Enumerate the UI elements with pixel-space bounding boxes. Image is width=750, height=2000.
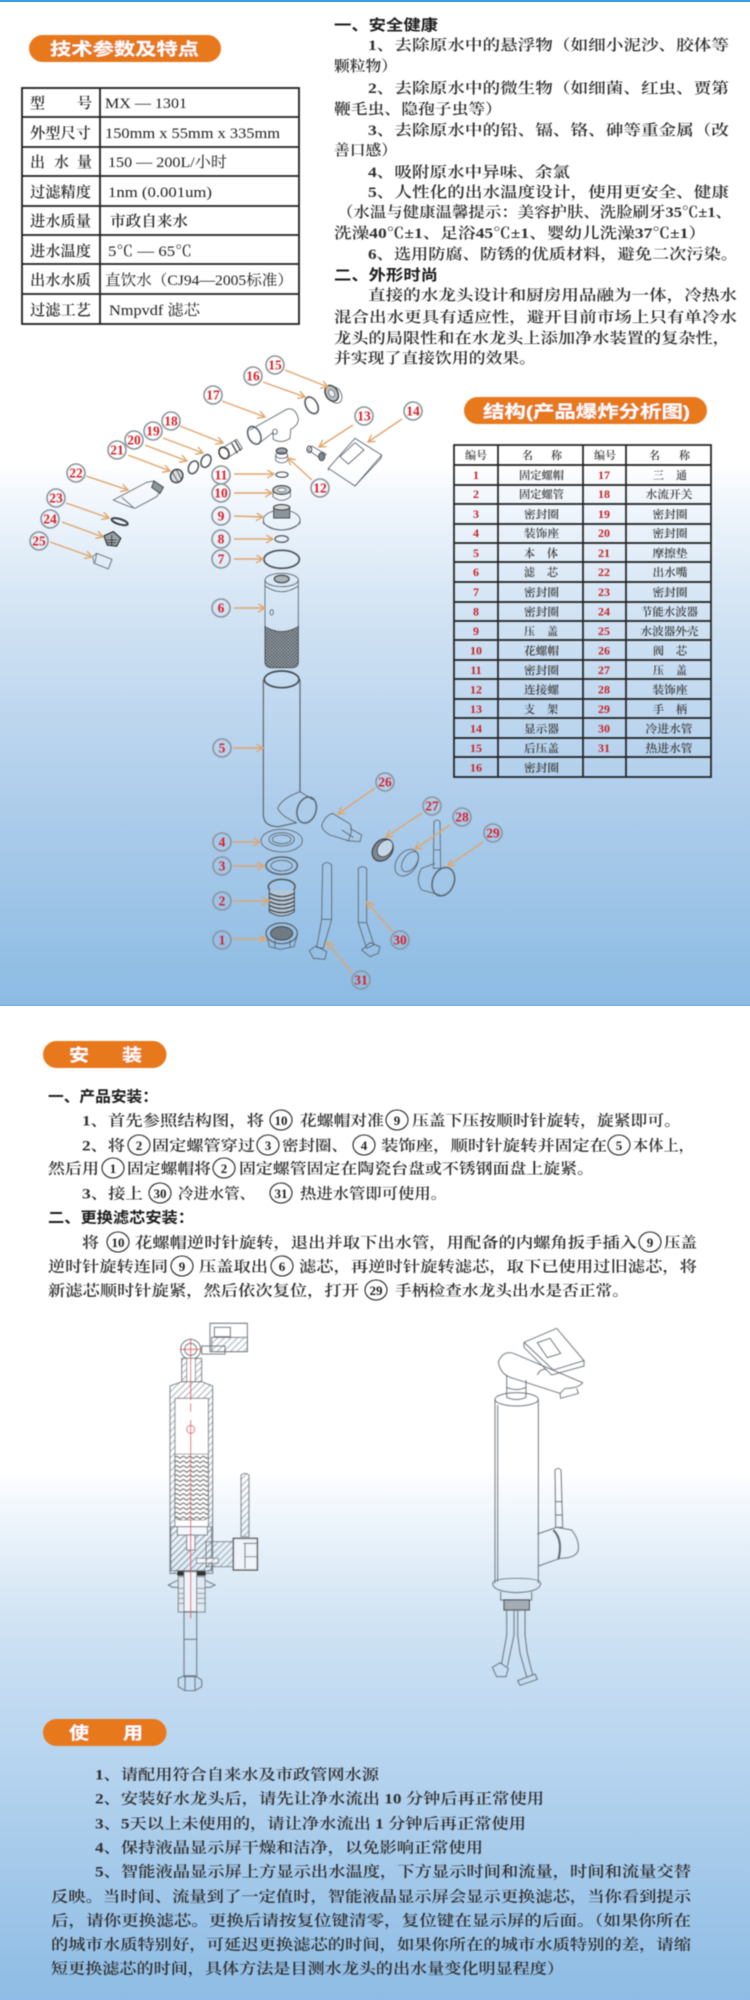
filter replacement line 1: 花螺帽逆时针旋转，退出并取下出水管，用配备的内螺角扳手插入 — [135, 1234, 637, 1252]
callout 26 — [338, 773, 394, 814]
parts list table: 27 — [598, 663, 610, 677]
neck section — [182, 1358, 202, 1382]
callout 19: 19 — [146, 424, 160, 438]
part 21 pad — [168, 467, 185, 485]
heading pill: structure — [464, 397, 707, 424]
base thread — [501, 1592, 532, 1610]
background: upper panel gradient — [0, 0, 750, 1006]
callout 13 — [319, 407, 373, 447]
parts list table: 节能水波器 — [641, 604, 698, 618]
callout 3: 3 — [219, 858, 226, 874]
callout 21 — [108, 441, 170, 471]
callout 17 — [204, 386, 265, 417]
part 18 switch fitting — [217, 439, 242, 461]
filter replacement line 2 — [48, 1256, 697, 1276]
specifications table: 过滤精度 — [30, 183, 91, 201]
parts list table: 固定螺管 — [519, 487, 564, 501]
install step 1: 花螺帽对准 — [300, 1112, 384, 1130]
filter replacement line 2: 逆时针旋转连同 — [48, 1258, 168, 1276]
install step 2: 4 — [361, 1138, 368, 1153]
callout 24 — [41, 510, 103, 537]
parts list table: 23 — [598, 585, 610, 599]
parts list table: 6 — [473, 565, 479, 579]
parts list table: 出水嘴 — [652, 565, 688, 579]
callout 27: 27 — [425, 798, 439, 814]
callout 11: 11 — [215, 468, 228, 482]
callout 25 — [30, 532, 92, 557]
parts list table: 密封圈 — [524, 663, 559, 677]
install step 1: 10 — [274, 1113, 288, 1128]
parts list table: 名称 — [649, 448, 691, 462]
filter replacement line 1: 压盖 — [664, 1234, 697, 1252]
install step 2: 密封圈、 — [282, 1138, 348, 1154]
usage instructions: 3、5天以上未使用的，请让净水流出 1 分钟后再正常使用 — [95, 1814, 526, 1832]
part 11 ring — [276, 472, 288, 477]
spout — [498, 1353, 583, 1398]
callout 23 — [47, 489, 109, 518]
parts list table: 7 — [473, 585, 479, 599]
part 10 nut — [273, 486, 290, 500]
red centre lines — [180, 1338, 202, 1618]
side handle — [537, 1468, 578, 1566]
specifications table: 150 — 200L/小时 — [108, 154, 227, 171]
features text block: 善口感） — [334, 141, 397, 159]
part 12 connector — [276, 448, 288, 463]
background: lower panel gradient — [0, 1006, 750, 2000]
parts list table: 压盖 — [653, 663, 687, 677]
parts list table: 17 — [598, 468, 610, 482]
callout 16: 16 — [246, 368, 260, 384]
install step 2: 2 — [136, 1138, 142, 1153]
usage instructions: 1、请配用符合自来水及市政管网水源 — [95, 1766, 380, 1784]
callout 30 — [367, 902, 409, 949]
callout 15: 15 — [268, 358, 282, 372]
parts list table: 密封圈 — [524, 760, 559, 774]
parts list table: 连接螺 — [524, 682, 560, 696]
part 1 nut — [266, 923, 297, 949]
cross-section drawing — [168, 1323, 257, 1691]
part 20 ring — [186, 459, 200, 475]
features text block: 4、吸附原水中异味、余氯 — [368, 163, 570, 181]
parts list table: 4 — [473, 526, 479, 540]
specifications table: 型号 — [30, 94, 92, 112]
part 24 aerator — [104, 532, 121, 546]
parts list table: 31 — [598, 741, 610, 755]
specifications table — [22, 88, 299, 324]
callout 23: 23 — [49, 490, 63, 506]
part 8 ring — [275, 536, 288, 542]
callout 12 — [288, 458, 329, 497]
parts list table: 三通 — [653, 469, 687, 482]
parts list table: 18 — [598, 487, 610, 501]
parts list table: 3 — [473, 507, 479, 521]
callout 4: 4 — [219, 834, 226, 850]
usage instructions: 2、安装好水龙头后，请先让净水流出 10 分钟后再正常使用 — [95, 1790, 544, 1808]
parts list table: 25 — [598, 624, 610, 638]
features text block: 一、安全健康 — [334, 16, 438, 34]
install step 3: 3、接上 — [82, 1184, 143, 1202]
upper panel bottom edge — [0, 1004, 750, 1006]
installation instructions — [48, 1088, 697, 1300]
parts list table: 26 — [598, 644, 610, 658]
features text block: 颗粒物） — [334, 57, 397, 75]
parts list table: 密封圈 — [652, 507, 688, 521]
parts list table: 10 — [470, 644, 482, 658]
parts list table: 显示器 — [524, 722, 559, 736]
parts list table: 支架 — [524, 702, 558, 716]
callout 22 — [67, 464, 128, 490]
usage instructions: 的城市水质特别好，可延迟更换滤芯的时间，如果你所在的城市水质特别的差，请缩 — [51, 1936, 691, 1954]
heading pill: installation: 安 — [69, 1046, 89, 1065]
parts list table: 手柄 — [653, 702, 687, 716]
part 15 nut — [322, 383, 345, 406]
usage instructions: 短更换滤芯的时间，具体方法是目测水龙头的出水量变化明显程度） — [51, 1960, 564, 1978]
features text block: 直接的水龙头设计和厨房用品融为一体，冷热水 — [368, 286, 737, 304]
heading pill: installation: 装 — [122, 1046, 142, 1065]
specifications table: 出水量 — [30, 153, 92, 171]
specifications table: Nmpvdf 滤芯 — [109, 302, 201, 319]
features text block: （水温与健康温馨提示：美容护肤、洗脸刷牙35℃±1、 — [337, 203, 732, 221]
part 23 ring — [111, 517, 128, 527]
assembled faucet drawing — [492, 1328, 584, 1685]
body wall section — [170, 1382, 213, 1573]
usage instructions: 4、保持液晶显示屏干燥和洁净，以免影响正常使用 — [95, 1838, 483, 1856]
part 9 gland — [263, 505, 300, 530]
parts list table: 冷进水管 — [646, 722, 692, 736]
parts list table: 21 — [598, 546, 610, 560]
exploded diagram: upper parts — [93, 383, 382, 569]
install step 2: 2、将 — [82, 1136, 125, 1154]
callout 20 — [125, 431, 187, 461]
callout 10 — [212, 484, 272, 502]
callout 7 — [212, 550, 263, 568]
features text block: 2、去除原水中的微生物（如细菌、红虫、贾第 — [368, 79, 729, 97]
callout 22: 22 — [69, 466, 83, 480]
parts list table: 12 — [470, 682, 482, 696]
callout 7: 7 — [218, 552, 225, 566]
callout 2 — [213, 892, 269, 910]
parts list table: 密封圈 — [652, 526, 688, 540]
parts list table: 阀芯 — [653, 644, 688, 658]
part 7 ring — [264, 550, 299, 568]
parts list table: 24 — [598, 604, 610, 618]
parts list table: 装饰座 — [652, 682, 688, 696]
install step 3: 冷进水管、 — [178, 1184, 255, 1202]
parts list table: 13 — [470, 702, 482, 716]
specifications table: 进水温度 — [30, 242, 91, 260]
features text block: 并实现了直接饮用的效果。 — [334, 349, 536, 367]
filter replacement line 2: 滤芯，再逆时针旋转滤芯，取下已使用过旧滤芯，将 — [299, 1258, 697, 1276]
callout 31 — [327, 942, 370, 989]
supply pipes — [492, 1610, 537, 1685]
filter replacement line 1 — [82, 1232, 697, 1252]
part 19 ring — [199, 453, 213, 469]
install step 3: 31 — [274, 1186, 288, 1201]
filter replacement line 3: 29 — [370, 1283, 383, 1298]
install step 2 continued: 固定螺帽将 — [127, 1160, 211, 1178]
filter replacement line 2: 压盖取出 — [199, 1258, 268, 1276]
callout 9 — [212, 507, 263, 525]
parts list table: 水波器外壳 — [640, 624, 698, 638]
features text block: 洗澡40℃±1、足浴45℃±1、婴幼儿洗澡37℃±1） — [334, 224, 706, 242]
heading pill: usage: 用 — [123, 1724, 143, 1743]
callout 29: 29 — [486, 826, 500, 840]
display head section — [181, 1323, 247, 1359]
install step 2: 装饰座，顺时针旋转并固定在 — [381, 1136, 607, 1154]
parts list table: 15 — [470, 741, 482, 755]
parts list table: 19 — [598, 507, 610, 521]
lower block section — [171, 1527, 218, 1571]
part 5 body — [263, 671, 320, 827]
callout 13: 13 — [357, 408, 371, 424]
install step 3: 热进水管即可使用。 — [300, 1184, 447, 1202]
specifications table: 过滤工艺 — [30, 301, 91, 319]
parts list table: 装饰座 — [524, 526, 559, 540]
filter replacement line 3 — [48, 1280, 629, 1300]
part 26 valve core — [322, 813, 362, 842]
parts list table: 密封圈 — [524, 604, 559, 618]
callout 16 — [244, 367, 305, 397]
features text block: 3、去除原水中的铅、镉、铬、砷等重金属（改 — [368, 121, 729, 139]
install step 3: 30 — [154, 1186, 166, 1201]
callout 12: 12 — [313, 480, 327, 496]
filter replacement line 1: 9 — [647, 1235, 654, 1250]
callout 4 — [213, 833, 260, 851]
parts list table: 编号 — [594, 448, 616, 462]
features text block: 混合出水更具有适应性，避开目前市场上只有单冷水 — [334, 308, 737, 326]
parts list table: 16 — [470, 760, 482, 774]
parts list table: 14 — [470, 722, 482, 736]
callout 6: 6 — [218, 600, 225, 616]
filter replacement line 2: 9 — [179, 1259, 186, 1274]
specifications table: 5℃ — 65℃ — [108, 244, 192, 260]
filter replacement line 1: 将 — [82, 1234, 99, 1252]
callout 19 — [144, 422, 203, 453]
features text block: 6、选用防腐、防锈的优质材料，避免二次污染。 — [368, 245, 738, 263]
parts list table: 密封圈 — [652, 585, 688, 599]
specifications table: 150mm x 55mm x 335mm — [105, 126, 280, 142]
install step 1 — [82, 1110, 681, 1130]
valve section — [206, 1473, 257, 1570]
parts list table: 5 — [473, 546, 479, 560]
callout 15 — [266, 356, 328, 387]
install step 3 — [82, 1183, 447, 1203]
install step 1: 9 — [394, 1113, 401, 1128]
features text block — [334, 16, 738, 367]
callout 8: 8 — [218, 532, 225, 546]
callout 28 — [415, 808, 471, 849]
exploded diagram: body parts — [261, 573, 459, 959]
heading pill: technical parameters: 技术参数及特点 — [50, 39, 199, 59]
subheading: product install: 一、产品安装： — [48, 1088, 158, 1106]
callout 26: 26 — [378, 774, 392, 790]
callout 18: 18 — [164, 414, 178, 428]
parts list table: 11 — [470, 663, 482, 677]
heading pill: structure: 结构(产品爆炸分析图) — [483, 402, 690, 422]
parts list table: 30 — [598, 722, 610, 736]
specifications table: MX — 1301 — [105, 96, 187, 112]
subheading: replace filter: 二、更换滤芯安装： — [48, 1210, 194, 1226]
part 13 bracket — [307, 446, 326, 461]
parts list table: 2 — [473, 487, 479, 501]
features text block: 鞭毛虫、隐孢子虫等） — [334, 100, 502, 118]
callout 14: 14 — [406, 404, 420, 418]
part 3 ring — [266, 857, 297, 874]
install step 2 continued: 固定螺管固定在陶瓷台盘或不锈钢面盘上旋紧。 — [239, 1160, 594, 1178]
part 27 gland — [368, 835, 397, 865]
callout 27 — [386, 797, 441, 837]
parts list table: 固定螺帽 — [519, 468, 564, 482]
part 4 base — [261, 829, 302, 852]
parts list table: 9 — [473, 624, 479, 638]
heading pill: usage: 使 — [69, 1724, 89, 1743]
callout 20: 20 — [127, 432, 141, 448]
callout 24: 24 — [43, 512, 57, 526]
callout 5: 5 — [219, 740, 226, 756]
install step 2 continued: 1 — [110, 1161, 116, 1176]
callout 11 — [212, 466, 274, 484]
parts list table: 摩擦垫 — [652, 546, 688, 560]
specifications table: 出水水质 — [30, 271, 91, 289]
callout 18 — [162, 412, 223, 443]
usage instructions — [51, 1766, 692, 1978]
features text block: 5、人性化的出水温度设计，使用更安全、健康 — [368, 183, 729, 201]
usage instructions: 5、智能液晶显示屏上方显示出水温度，下方显示时间和流量，时间和流量交替 — [95, 1862, 691, 1880]
specifications table: 外型尺寸 — [30, 124, 91, 142]
install step 2 continued: 然后用 — [48, 1160, 99, 1178]
usage instructions: 反映。当时间、流量到了一定值时，智能液晶显示屏会显示更换滤芯，当你看到提示 — [51, 1888, 692, 1906]
parts list table: 28 — [598, 682, 610, 696]
callout 5 — [213, 739, 263, 757]
install step 2 continued: 2 — [221, 1161, 227, 1176]
parts list table: 29 — [598, 702, 610, 716]
callout 2: 2 — [219, 894, 226, 908]
parts list table — [454, 445, 711, 777]
callout 17: 17 — [206, 388, 220, 402]
callout 29 — [448, 824, 502, 866]
specifications table: 市政自来水 — [110, 212, 188, 230]
callout 9: 9 — [218, 508, 225, 524]
filter replacement line 3: 手柄检查水龙头出水是否正常。 — [395, 1282, 629, 1300]
parts list table: 密封圈 — [524, 585, 559, 599]
callout 1 — [213, 931, 266, 949]
callout 21: 21 — [110, 442, 124, 458]
callout 30: 30 — [393, 932, 407, 948]
parts list table: 8 — [473, 604, 479, 618]
parts list table: 20 — [598, 526, 610, 540]
filter replacement line 2: 6 — [279, 1259, 286, 1274]
part 28 trim — [390, 845, 423, 880]
features text block: 二、外形时尚 — [334, 266, 438, 284]
part 16 ring — [302, 395, 321, 416]
install step 1: 压盖下压按顺时针旋转，旋紧即可。 — [412, 1112, 681, 1130]
callout 1: 1 — [219, 932, 226, 948]
body — [493, 1393, 541, 1593]
parts list table: 22 — [598, 565, 610, 579]
filter replacement line 1: 10 — [112, 1235, 124, 1250]
specifications table: 直饮水（CJ94—2005标准） — [105, 272, 293, 289]
parts list table: 本体 — [524, 546, 558, 560]
base and pipe — [168, 1571, 215, 1691]
features text block: 龙头的局限性和在水龙头上添加净水装置的复杂性， — [334, 329, 730, 347]
parts list table: 压盖 — [524, 624, 558, 638]
install step 2 — [82, 1135, 694, 1155]
part 17 tee — [245, 409, 298, 446]
heading pill: usage — [43, 1719, 166, 1746]
install step 2: 固定螺管穿过 — [152, 1136, 255, 1154]
parts list table: 滤芯 — [524, 565, 559, 579]
part 30 cold pipe — [358, 867, 380, 957]
neck — [507, 1375, 526, 1399]
parts list table: 热进水管 — [646, 741, 692, 755]
parts list table: 水流开关 — [646, 487, 692, 501]
part 25 aerator shell — [93, 553, 112, 569]
part 6 filter core — [265, 573, 298, 668]
display box — [524, 1328, 584, 1375]
part 29 handle — [418, 820, 459, 899]
part 2 tube — [268, 879, 295, 916]
top blue rule — [0, 0, 750, 2]
specifications table: 进水质量 — [30, 212, 91, 230]
parts list table: 编号 — [465, 448, 487, 462]
install step 1: 1、首先参照结构图，将 — [82, 1112, 264, 1130]
part 31 hot pipe — [309, 862, 332, 959]
specifications table: 1nm (0.001um) — [108, 185, 212, 201]
parts list table: 1 — [473, 468, 479, 482]
callout 8 — [212, 530, 273, 548]
filter replacement line 3: 新滤芯顺时针旋紧，然后依次复位，打开 — [48, 1282, 359, 1300]
parts list table: 名称 — [522, 448, 563, 462]
callout 10: 10 — [214, 486, 228, 500]
callout 3 — [213, 857, 264, 875]
parts list table: 后压盖 — [524, 741, 559, 755]
features text block: 1、去除原水中的悬浮物（如细小泥沙、胶体等 — [368, 36, 729, 54]
part 22 spout — [113, 481, 163, 508]
parts list table: 花螺帽 — [524, 644, 559, 658]
install step 2: 本体上， — [633, 1136, 694, 1154]
usage instructions: 后，请你更换滤芯。更换后请按复位键清零，复位键在显示屏的后面。（如果你所在 — [51, 1912, 691, 1930]
callout 14 — [368, 402, 422, 442]
callout 28: 28 — [455, 810, 469, 824]
part 14 display — [328, 438, 382, 486]
parts list table: 密封圈 — [524, 507, 559, 521]
heading pill: installation — [43, 1041, 166, 1068]
install step 2: 5 — [616, 1138, 623, 1153]
callout 6 — [212, 599, 265, 617]
callout 31: 31 — [354, 972, 368, 988]
heading pill: technical parameters — [29, 35, 221, 62]
install step 2: 3 — [265, 1138, 272, 1153]
install step 2 continued — [48, 1158, 594, 1178]
filter mesh section — [175, 1454, 208, 1520]
callout 25: 25 — [32, 534, 46, 548]
